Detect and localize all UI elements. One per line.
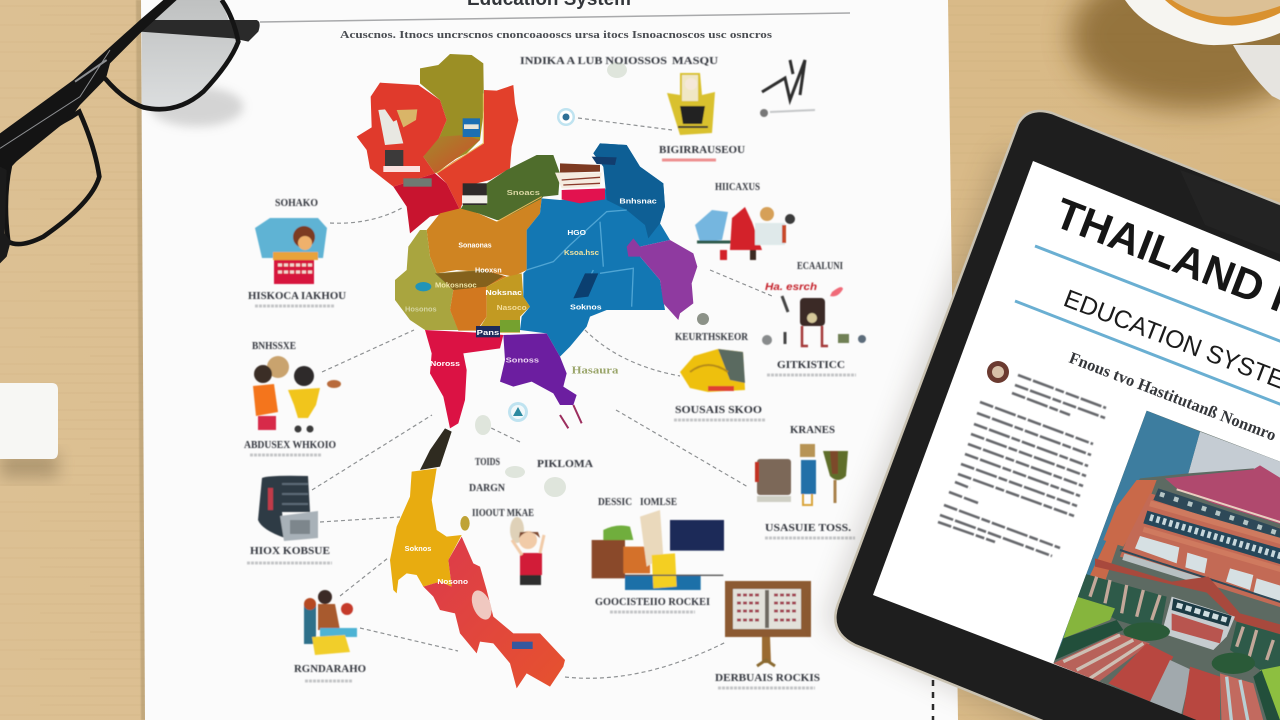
region: north west red [357, 83, 447, 187]
right columns [1230, 622, 1280, 670]
map labels: Hosonos [405, 305, 437, 314]
picture base [1040, 400, 1280, 720]
icon: group of pupils [304, 590, 357, 655]
map sign: dark orange patch [435, 270, 503, 290]
captions: DARGN [469, 482, 505, 494]
icon: yellow book [680, 349, 745, 392]
map labels [405, 188, 657, 376]
icon: classroom scene [695, 207, 795, 260]
lens shadow on paper [150, 87, 243, 127]
left lawn [1063, 597, 1115, 638]
icon: server cabinet [258, 476, 318, 541]
region: dark blue north east [593, 143, 665, 238]
middle window row [1143, 511, 1280, 570]
region: dark isthmus [420, 428, 452, 470]
tablet headings: Fnous tvo Hastitutanß Nonmro [1067, 348, 1279, 445]
map sign: blue plaque [463, 118, 480, 137]
region: blue east [520, 143, 670, 357]
icon: teacher and pupils [255, 218, 327, 284]
region: crimson lower north [393, 173, 460, 233]
marker: grey medallion [697, 313, 709, 325]
captions: DERBUAIS ROCKIS [715, 672, 820, 684]
map labels: Ksoa.hsc [564, 248, 599, 257]
map labels: Sonaonas [458, 240, 492, 249]
faint map decorations [475, 62, 627, 497]
map labels: Hooxsn [475, 265, 502, 274]
map labels: Hasaura [572, 365, 619, 376]
target markers [475, 62, 709, 497]
captions: IIOOUT MKAE [472, 507, 534, 519]
top bar [0, 0, 177, 182]
captions: KEURTHSKEOR [675, 331, 749, 343]
paper title [260, 0, 850, 41]
region: olive north [420, 54, 484, 173]
left edge piece [0, 167, 11, 263]
region: olive west [395, 230, 458, 330]
pink roof [1165, 465, 1280, 530]
region: gold [477, 273, 530, 333]
white sliver under sky edge [1090, 541, 1118, 580]
captions: IOMLSE [640, 496, 677, 508]
region: north east red [437, 85, 518, 210]
captions: SOUSAIS SKOO [675, 404, 762, 416]
map labels: Mokosnsoc [435, 280, 477, 289]
map: southern Thailand [390, 428, 565, 688]
tablet shadow [825, 150, 1280, 720]
captions: HISKOCA IAKHOU [248, 290, 346, 302]
captions: MASQU [672, 55, 718, 67]
map figure: white figure [378, 109, 432, 187]
island [460, 516, 470, 531]
vertical dashed mark on paper [932, 680, 934, 720]
captions: TOIDS [475, 456, 500, 468]
tablet screen [873, 161, 1280, 720]
tablet school picture [1040, 400, 1280, 720]
lower windows [1135, 536, 1280, 601]
map sign: blue oval [415, 282, 431, 291]
icon: girl reading [510, 517, 544, 585]
captions: ABDUSEX WHKOIO [244, 439, 336, 451]
captions: ECAALUNI [797, 260, 843, 272]
blue sky [1053, 411, 1200, 663]
bushes [1123, 622, 1170, 641]
map sign: book stack [555, 157, 617, 203]
captions: PIKLOMA [537, 458, 593, 470]
captions [244, 55, 856, 688]
connector lines [312, 118, 772, 678]
coffee surface [1165, 0, 1280, 25]
captions: BNHSSXE [252, 340, 296, 352]
blue inner borders [527, 210, 633, 307]
map labels: Noksnac [485, 288, 522, 297]
captions: RGNDARAHO [294, 663, 366, 675]
temple arm [140, 20, 260, 42]
map labels: Snoacs [507, 188, 540, 197]
map sign: dark plaque [462, 183, 487, 205]
icon: ink sketch [760, 60, 815, 117]
upper window row [1153, 488, 1280, 538]
icon: robot and machinery [762, 282, 866, 346]
map sign: Bangkok label [476, 326, 500, 337]
captions: HIOX KOBSUE [250, 545, 330, 557]
region: yellow upper south [390, 468, 462, 593]
icon: books and folder [592, 510, 724, 590]
orange tower [1103, 480, 1157, 547]
region: blended middle north [423, 135, 480, 173]
icon: machine, person and goblet [755, 444, 848, 505]
map labels: Bnhsnac [619, 196, 657, 205]
paper sheet [136, 0, 958, 720]
captions: SOHAKO [275, 197, 318, 209]
map labels: Sonoss [506, 356, 539, 365]
region: crimson central [425, 330, 503, 428]
map: northern and central Thailand [357, 54, 697, 428]
captions: KRANES [790, 424, 835, 436]
white marker [0, 383, 58, 478]
tablet body [835, 111, 1280, 720]
region: orange centre [427, 198, 542, 277]
tablet article text [938, 375, 1106, 556]
coffee cup [1070, 0, 1280, 110]
map labels: Noross [430, 359, 460, 368]
icon: teacher on yellow chair [667, 73, 715, 135]
southern labels: Soknos [405, 544, 431, 553]
southern labels: Nosono [437, 577, 469, 586]
map sign: small green patch [500, 320, 520, 332]
pale sky [1188, 432, 1280, 478]
oval detail [468, 588, 495, 622]
icon: two children [253, 356, 341, 432]
icon: notice board [725, 581, 811, 666]
map labels: HGO [567, 228, 586, 237]
cup rim [1125, 0, 1280, 45]
tablet emblem [987, 361, 1009, 383]
cup shadow [1070, 0, 1280, 110]
map labels: Nasoco [497, 303, 527, 312]
region: orange lower [437, 270, 507, 331]
captions: USASUIE TOSS. [765, 522, 851, 534]
region: green north east [460, 155, 560, 220]
right lens rim [105, 0, 238, 109]
map labels: Soknos [570, 302, 602, 311]
right lawn [1260, 663, 1280, 720]
entry hall [1162, 597, 1235, 650]
region: purple east [627, 238, 697, 320]
tablet headings [1015, 190, 1280, 445]
map labels: Pans [477, 328, 499, 337]
paper icons and captions [244, 55, 866, 688]
columns under roof [1078, 574, 1167, 624]
orange band one [1150, 503, 1280, 547]
marker: southern target [508, 402, 528, 422]
captions: HIICAXUS [715, 181, 760, 193]
region: purple south east [500, 333, 577, 405]
southern labels [405, 544, 469, 586]
right lens glass [142, 0, 237, 110]
saucer [1233, 45, 1280, 100]
tablet glare [1180, 170, 1280, 260]
captions: GOOCISTEIIO ROCKEI [595, 596, 710, 608]
captions: INDIKA A LUB NOIOSSOS [520, 55, 667, 67]
walkway right stripes [1220, 673, 1265, 720]
tablet [825, 111, 1280, 720]
captions: GITKISTICC [777, 359, 845, 371]
red lower roof [1095, 558, 1280, 640]
region: red lower south [423, 537, 565, 688]
walkway left stripes [1053, 633, 1150, 683]
paper title: Acuscnos. Itnocs uncrscnos cnoncoaooscs ursa itocs Isnoacnoscos usc osncros [340, 30, 772, 41]
marker: northern target [557, 108, 575, 126]
walkway red centre [1108, 643, 1173, 702]
orange band two [1143, 529, 1280, 575]
glasses [0, 0, 260, 263]
captions: DESSIC [598, 496, 632, 508]
icon: robot and machinery: Ha. esrch [765, 282, 817, 293]
blue plaque south [512, 642, 533, 649]
captions: BIGIRRAUSEOU [659, 144, 745, 156]
left lens rim [6, 112, 99, 244]
facade [1120, 493, 1280, 613]
